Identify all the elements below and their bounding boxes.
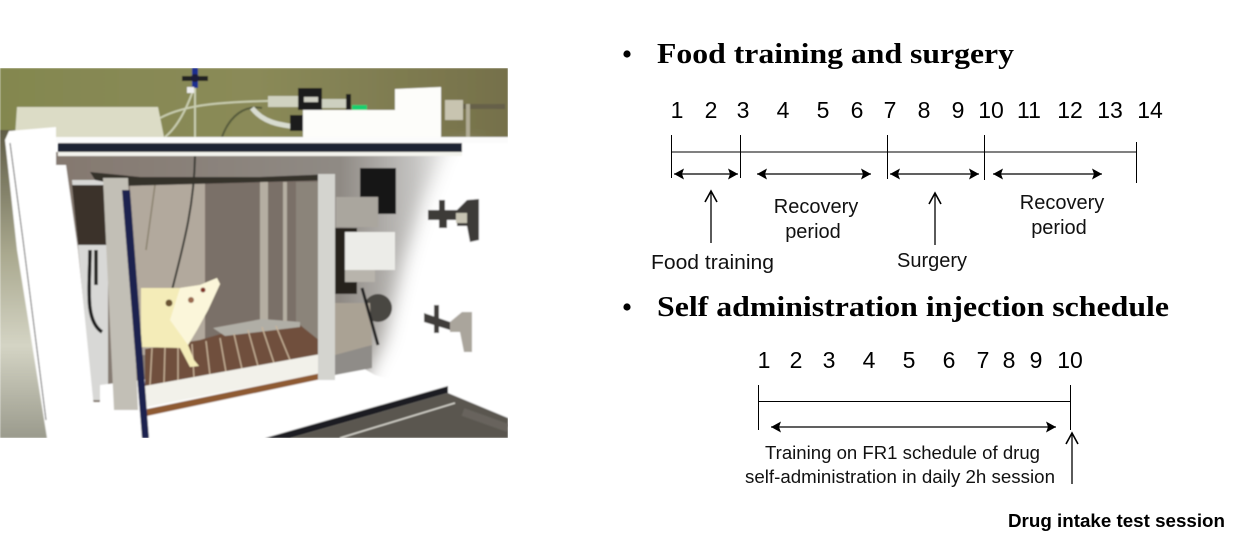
day numbers: 9 — [1030, 347, 1042, 373]
label: recovery period 2: period — [1031, 217, 1087, 239]
white pump housing — [303, 87, 441, 138]
crop edge mask — [0, 0, 510, 68]
label: recovery period 2: Recovery — [1020, 192, 1104, 214]
syringe pump — [268, 88, 367, 131]
open left door — [5, 127, 97, 438]
cage right post — [318, 174, 335, 380]
floor rail — [265, 386, 448, 438]
day numbers: 6 — [851, 97, 863, 123]
label: surgery: Surgery — [897, 250, 967, 272]
day numbers: 3 — [823, 347, 835, 373]
cables — [89, 250, 102, 332]
grid floor — [145, 322, 325, 386]
day numbers: 14 — [1137, 97, 1163, 123]
cage blue door edge — [122, 190, 149, 438]
training span arrow — [771, 426, 1056, 428]
dark motor — [364, 294, 392, 322]
cabinet top bar — [50, 137, 508, 163]
day numbers: 11 — [1017, 97, 1041, 123]
right cabinet white side — [440, 138, 508, 438]
day numbers: 2 — [790, 347, 802, 373]
label: training description: Training on FR1 schedule of drug — [765, 443, 1040, 463]
day numbers: 3 — [737, 97, 749, 123]
day numbers: 12 — [1057, 97, 1083, 123]
day numbers: 5 — [817, 97, 829, 123]
label: recovery period 1: period — [785, 221, 841, 243]
timeline: food training and surgery — [651, 97, 1163, 274]
day numbers: 4 — [777, 97, 790, 123]
heading: food training and surgery: Food training and surgery — [657, 38, 1015, 70]
cage left post — [103, 178, 138, 410]
photo: rat in self-administration operant chamber — [0, 68, 508, 438]
cabinet interior — [56, 152, 462, 402]
day numbers: 10 — [1057, 347, 1083, 373]
day numbers: 7 — [977, 347, 989, 373]
label: training description: self-administration in daily 2h session — [745, 467, 1055, 487]
icon: blue swivel valve — [182, 68, 208, 93]
span arrows — [674, 173, 1102, 175]
icon: lower hinge — [424, 305, 472, 352]
glass jar — [336, 197, 378, 227]
day numbers: 13 — [1097, 97, 1123, 123]
arrow: food training — [710, 191, 712, 243]
timeline axis — [671, 135, 1136, 183]
black fan box — [360, 168, 396, 214]
day numbers: 5 — [903, 347, 915, 373]
top-left white box — [15, 107, 164, 137]
front tray — [145, 353, 326, 407]
rat — [141, 278, 220, 367]
label: recovery period 1: Recovery — [774, 196, 858, 218]
chamber top frame — [90, 172, 335, 186]
dark mount behind dispenser — [335, 228, 357, 294]
right cabinet white side edge — [462, 138, 508, 418]
day numbers: 6 — [943, 347, 955, 373]
day numbers: 10 — [978, 97, 1004, 123]
wall background — [0, 68, 508, 140]
far-left room strip — [0, 130, 50, 438]
inner cable — [146, 185, 155, 250]
tether cable — [170, 156, 195, 298]
label: drug intake test session: Drug intake test session — [1008, 511, 1225, 531]
day numbers: 7 — [884, 97, 896, 123]
white below tray — [100, 355, 440, 438]
day numbers: 1 — [671, 97, 683, 123]
infusion tubing — [160, 85, 303, 137]
timeline: self administration — [745, 347, 1225, 531]
label: food training: Food training — [651, 252, 774, 274]
area behind cage left — [72, 180, 108, 400]
arrow: drug intake test — [1071, 433, 1073, 484]
day numbers: 1 — [758, 347, 770, 373]
arrow: surgery — [934, 193, 936, 245]
heading: self administration injection schedule: Self administration injection schedule — [657, 291, 1169, 323]
day numbers: 4 — [863, 347, 876, 373]
day numbers — [758, 347, 1083, 373]
day numbers: 8 — [1003, 347, 1015, 373]
chamber back wall — [130, 180, 210, 355]
timeline axis — [758, 385, 1071, 430]
day numbers: 9 — [952, 97, 964, 123]
grey shadow under apparatus — [335, 345, 372, 375]
white fade inside cabinet — [350, 150, 480, 410]
day numbers: 2 — [705, 97, 717, 123]
icon: upper hinge — [428, 199, 479, 242]
day numbers: 8 — [918, 97, 930, 123]
wall bracket — [445, 100, 505, 138]
day numbers — [671, 97, 1163, 123]
grey chamber box — [335, 303, 372, 355]
white pellet dispenser — [345, 232, 395, 270]
